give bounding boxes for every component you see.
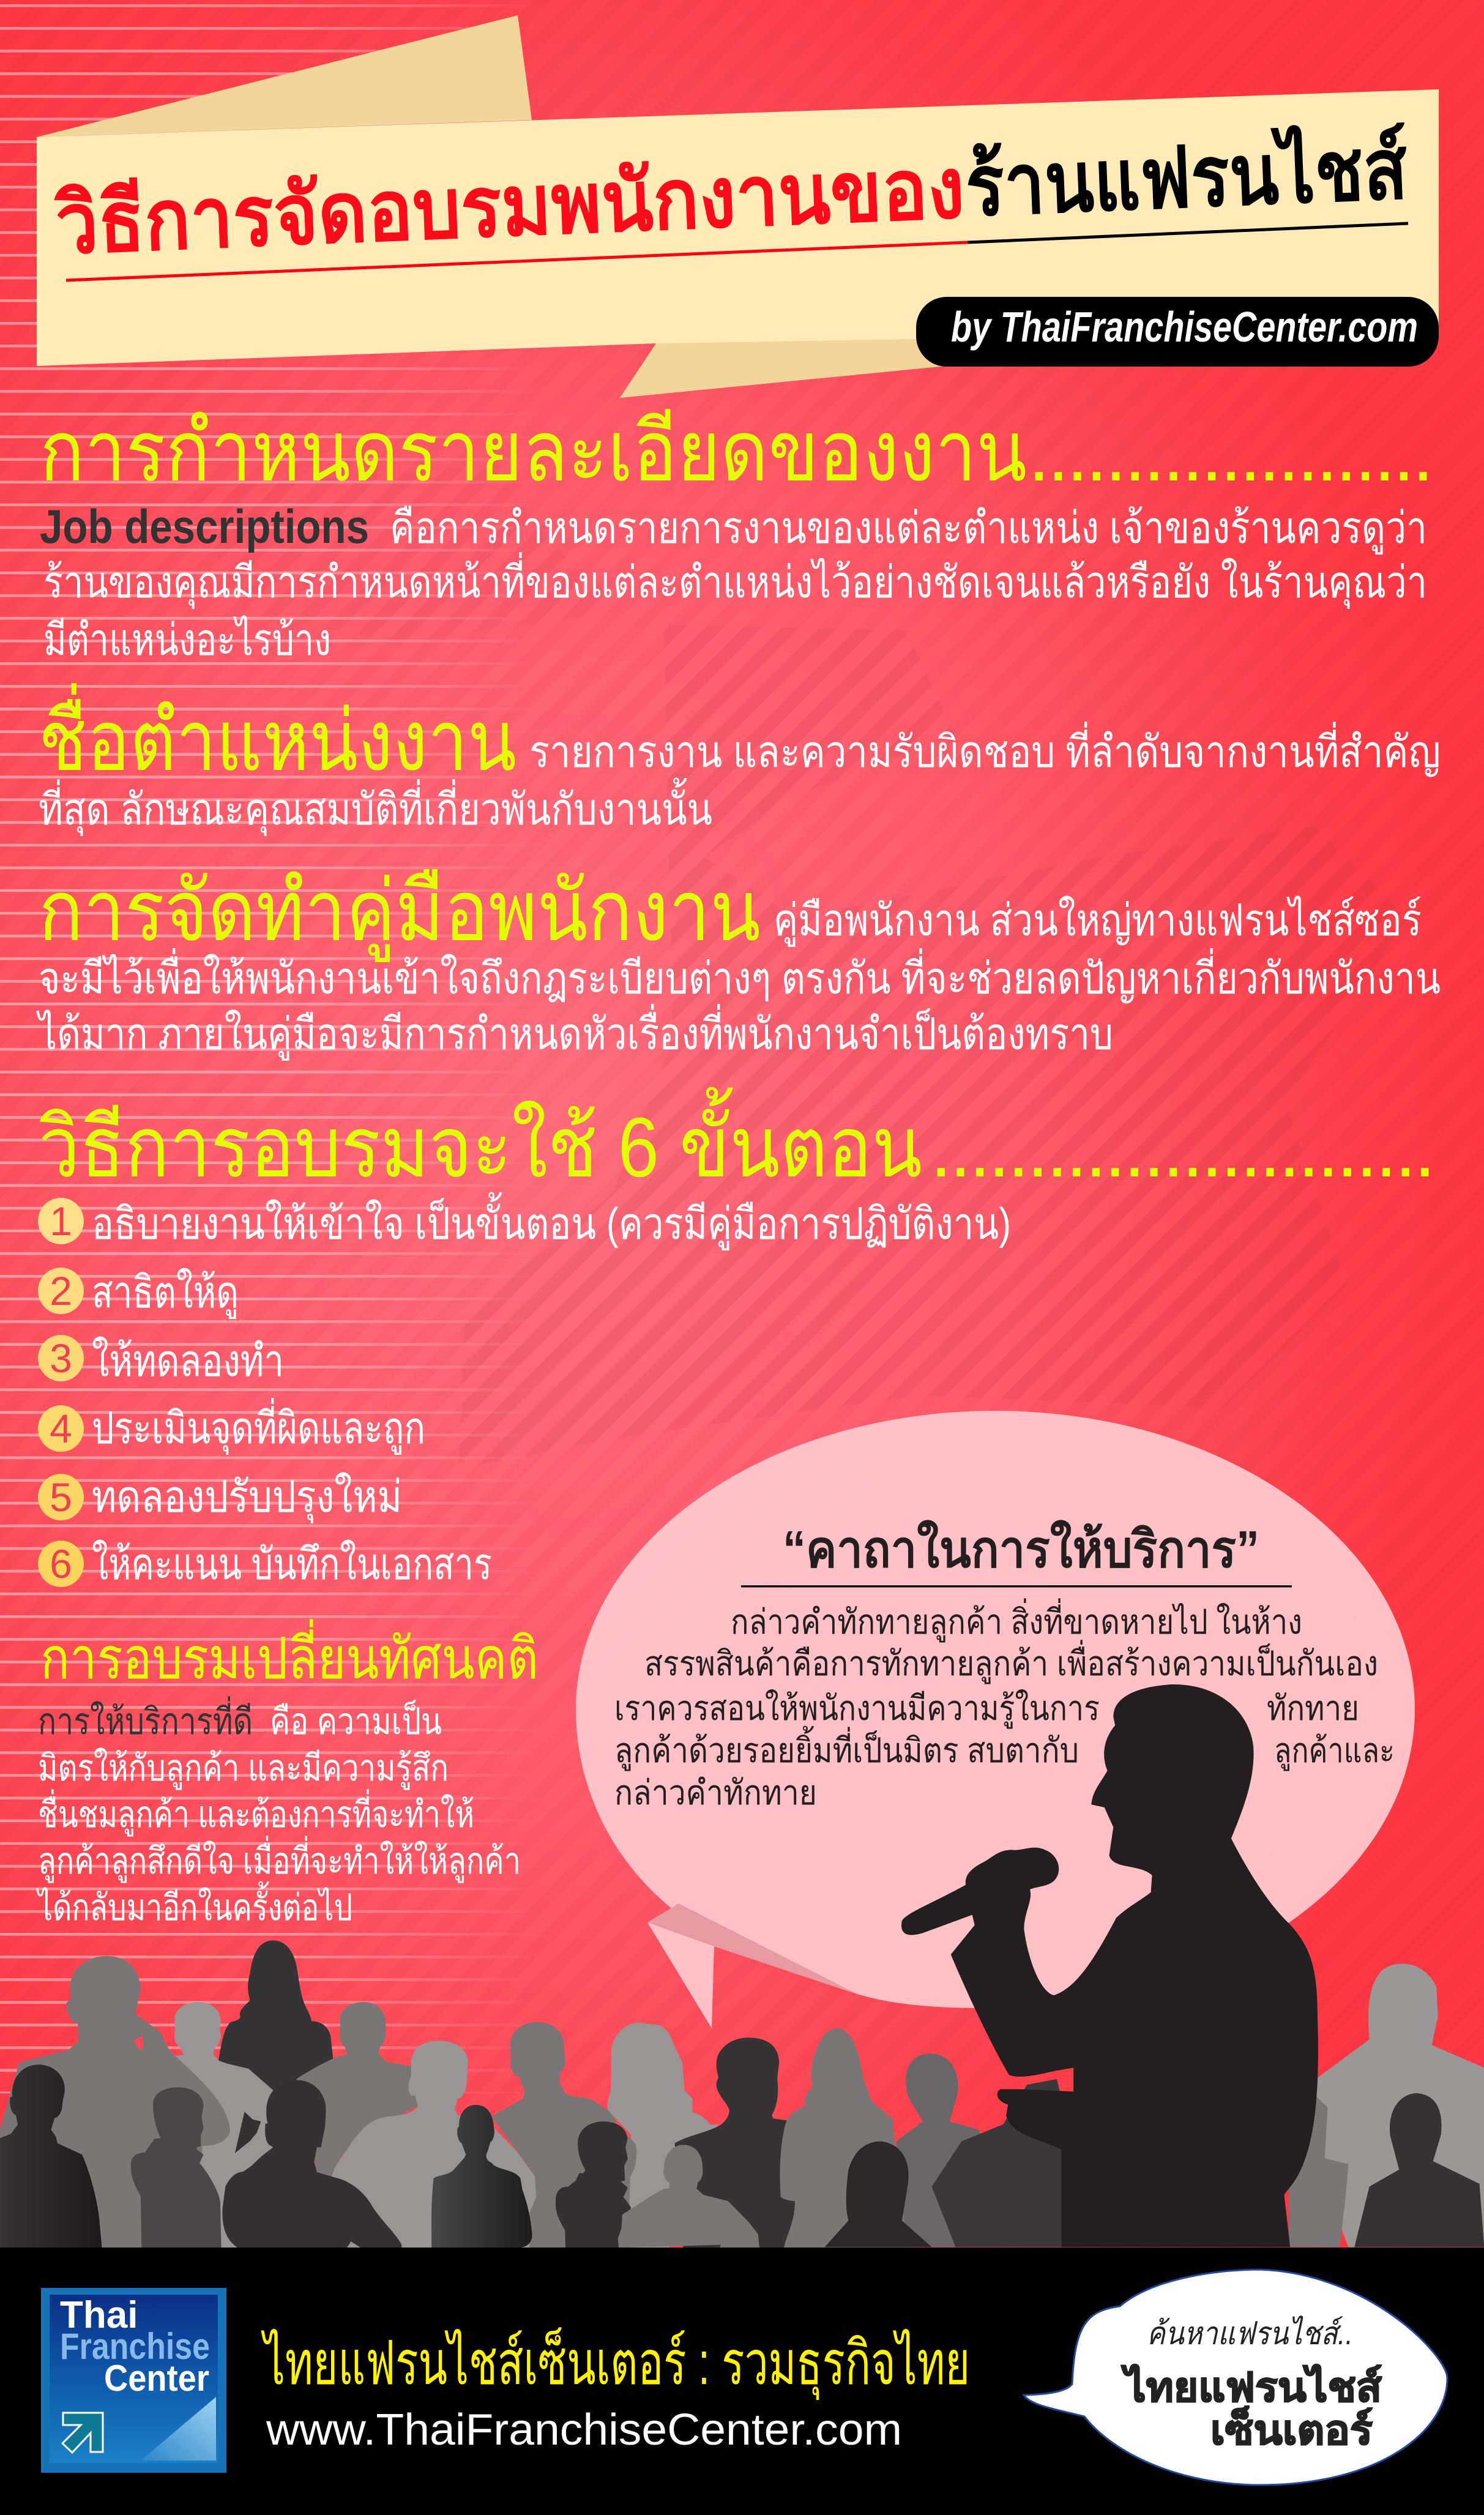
bubble text: ลูกค้าและ bbox=[1274, 1731, 1395, 1771]
bubble title: “คาถาในการให้บริการ” bbox=[783, 1520, 1259, 1578]
section: job descriptions bbox=[40, 405, 1434, 665]
bubble text bbox=[614, 1598, 1395, 1812]
step 1: 1 bbox=[50, 1198, 72, 1244]
audience crowd right and speaker bbox=[824, 1684, 1484, 2247]
ribbon main panel bbox=[37, 89, 1439, 366]
byline pill bbox=[916, 297, 1439, 367]
bubble text: ลูกค้าด้วยรอยยิ้มที่เป็นมิตร สบตากับ bbox=[614, 1726, 1079, 1771]
body text: Job descriptions bbox=[40, 499, 369, 553]
ribbon banner bbox=[37, 15, 1439, 398]
step 5: ทดลองปรับปรุงใหม่ bbox=[92, 1472, 402, 1523]
step 6: ให้คะแนน บันทึกในเอกสาร bbox=[92, 1539, 492, 1589]
step 6: 6 bbox=[50, 1541, 72, 1586]
heading: วิธีการอบรมจะใช้ 6 ขั้นตอน bbox=[39, 1087, 922, 1195]
section: six training steps bbox=[38, 1087, 1436, 1589]
body text bbox=[36, 895, 1441, 1061]
section: employee manual bbox=[36, 864, 1441, 1061]
front row people bbox=[0, 2065, 102, 2248]
body text: ลูกค้าลูกสึกดีใจ เมื่อที่จะทำให้ให้ลูกค้า bbox=[38, 1836, 521, 1883]
section: attitude training bbox=[36, 1619, 539, 1928]
step 4 bbox=[38, 1398, 425, 1455]
step 5: 5 bbox=[50, 1474, 72, 1520]
body text: ได้มาก ภายในคู่มือจะมีการกำหนดหัวเรื่องที่พนักงานจำเป็นต้องทราบ bbox=[36, 1004, 1113, 1061]
body text: ชื่นชมลูกค้า และต้องการที่จะทำให้ bbox=[38, 1789, 474, 1837]
body text: การให้บริการที่ดี bbox=[38, 1696, 253, 1742]
section: job title bbox=[39, 683, 1441, 836]
ribbon lower flap bbox=[620, 331, 979, 398]
body text bbox=[39, 722, 1441, 836]
logo: Center bbox=[104, 2358, 209, 2399]
step 2 bbox=[38, 1268, 239, 1319]
right side people bbox=[1316, 1964, 1484, 2247]
heading: การกำหนดรายละเอียดของงาน bbox=[40, 405, 1027, 499]
step 1 bbox=[38, 1192, 1011, 1250]
logo bbox=[41, 2288, 226, 2473]
heading dots: .......................... bbox=[930, 1106, 1436, 1194]
step 3: ให้ทดลองทำ bbox=[92, 1336, 284, 1386]
step 3 bbox=[38, 1335, 284, 1386]
step 4: ประเมินจุดที่ผิดและถูก bbox=[92, 1398, 425, 1455]
bubble text: กล่าวคำทักทายลูกค้า สิ่งที่ขาดหายไป ในห้าง bbox=[731, 1598, 1302, 1643]
step 4: 4 bbox=[50, 1406, 72, 1451]
title: ร้านแฟรนไชส์ bbox=[964, 121, 1409, 234]
step 2: 2 bbox=[50, 1268, 72, 1314]
ribbon back flap bbox=[37, 15, 532, 137]
audience back row behind left group bbox=[896, 2053, 1073, 2247]
heading dots: ..................... bbox=[1028, 410, 1434, 498]
footer tagline: ไทยแฟรนไชส์เซ็นเตอร์ : รวมธุรกิจไทย bbox=[261, 2326, 970, 2401]
title bbox=[53, 121, 1409, 280]
heading: การอบรมเปลี่ยนทัศนคติ bbox=[40, 1619, 539, 1691]
step 1: อธิบายงานให้เข้าใจ เป็นขั้นตอน (ควรมีคู่มือการปฏิบัติงาน) bbox=[92, 1192, 1011, 1250]
body text: คือ ความเป็น bbox=[270, 1700, 442, 1742]
step 3: 3 bbox=[50, 1336, 72, 1381]
speaker silhouette with microphone bbox=[901, 1684, 1318, 2247]
footer website: www.ThaiFranchiseCenter.com bbox=[266, 2405, 902, 2454]
step 6 bbox=[38, 1539, 492, 1589]
body text: มีตำแหน่งอะไรบ้าง bbox=[43, 615, 331, 665]
body text: ได้กลับมาอีกในครั้งต่อไป bbox=[36, 1881, 352, 1928]
bubble text: เราควรสอนให้พนักงานมีความรู้ในการ bbox=[614, 1689, 1100, 1729]
bubble text: กล่าวคำทักทาย bbox=[614, 1773, 817, 1812]
heading: การจัดทำคู่มือพนักงาน bbox=[39, 864, 761, 962]
title: วิธีการจัดอบรมพนักงานของ bbox=[53, 141, 966, 272]
footer speech bubble bbox=[1024, 2270, 1447, 2485]
logo: Franchise bbox=[60, 2326, 210, 2367]
heading: ชื่อตำแหน่งงาน bbox=[39, 683, 516, 788]
audience crowd left bbox=[0, 1940, 908, 2248]
bubble text: ทักทาย bbox=[1267, 1689, 1359, 1727]
bubble text: สรรพสินค้าคือการทักทายลูกค้า เพื่อสร้างความเป็นกันเอง bbox=[644, 1640, 1378, 1684]
footer speech bubble: ค้นหาแฟรนไชส์.. bbox=[1147, 2315, 1353, 2352]
step 2: สาธิตให้ดู bbox=[92, 1268, 239, 1319]
body text bbox=[40, 499, 1427, 665]
speech bubble bbox=[576, 1411, 1415, 2028]
logo: Thai bbox=[60, 2294, 138, 2336]
bubble fold bbox=[647, 1904, 857, 1994]
bubble shape bbox=[576, 1411, 1415, 2028]
footer band bbox=[0, 2248, 1484, 2515]
footer speech bubble: ไทยแฟรนไชส์ bbox=[1121, 2364, 1382, 2410]
body text: ที่สุด ลักษณะคุณสมบัติที่เกี่ยวพันกับงานนั้น bbox=[39, 777, 712, 836]
body text: มิตรให้กับลูกค้า และมีความรู้สึก bbox=[38, 1747, 449, 1790]
footer speech bubble: เซ็นเตอร์ bbox=[1210, 2405, 1373, 2453]
body text bbox=[36, 1696, 521, 1928]
